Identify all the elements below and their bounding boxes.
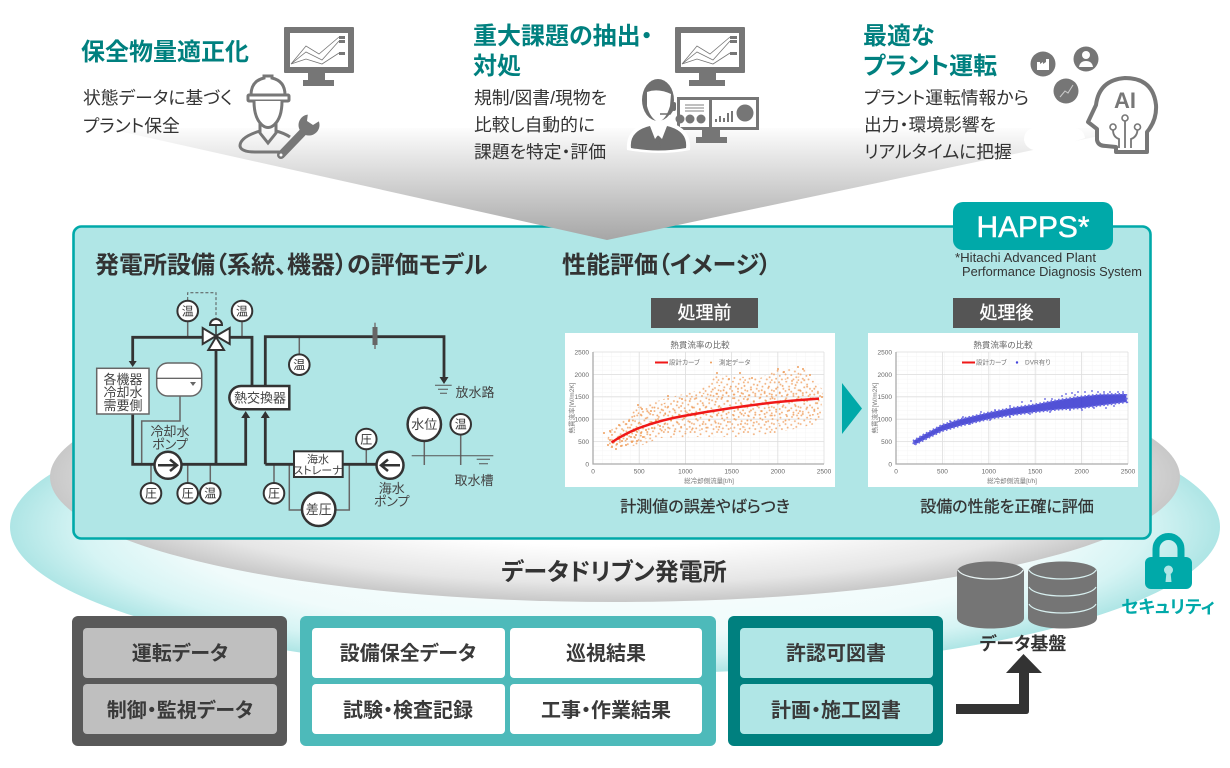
label: cooling water pump — [150, 424, 190, 452]
label: seawater pump: ポンプ — [374, 494, 410, 509]
note: HAPPS definition — [955, 251, 1142, 279]
label: before processing: 処理前 — [678, 303, 732, 323]
icon: AI head: AI — [1114, 88, 1136, 113]
tank — [157, 363, 202, 396]
text: optimal operation: プラント運転情報から — [864, 88, 1029, 108]
heading: critical issues — [473, 23, 653, 80]
axis ticks: 500 — [881, 439, 892, 446]
badge: HAPPS: HAPPS* — [976, 211, 1090, 244]
legend: DVR有り — [1025, 358, 1051, 366]
heat exchanger — [229, 386, 289, 409]
text: optimal operation — [864, 88, 1029, 162]
intake: 取水槽 — [454, 473, 494, 488]
panel: drawings: 許認可図書 — [786, 642, 886, 665]
sensor labels: 温 — [236, 304, 248, 318]
panel: operating data: 運転データ — [132, 641, 228, 665]
legend — [655, 358, 750, 366]
axis titles: 熱貫流率[W/m2K] — [567, 382, 576, 433]
line: design curve — [612, 399, 819, 442]
badge: HAPPS — [953, 202, 1113, 250]
axis ticks: 1000 — [878, 417, 892, 424]
heading: performance evaluation: 性能評価（イメージ） — [562, 252, 771, 279]
seawater pump — [376, 452, 404, 479]
text: maintenance — [83, 88, 233, 136]
axis titles: 熱貫流率[W/m2K] — [870, 382, 879, 433]
chart title: 熱貫流率の比較 — [670, 340, 730, 350]
axis ticks: 500 — [578, 439, 589, 446]
axis ticks: 500 — [937, 468, 948, 476]
axis ticks: 2500 — [878, 350, 892, 356]
strainer: 海水 — [307, 452, 329, 466]
block: maintenance optimisation — [81, 27, 354, 156]
axis ticks: 2000 — [878, 372, 892, 379]
label: after processing — [953, 298, 1060, 328]
panel: operating data: 制御・監視データ — [107, 698, 253, 722]
panel: maintenance data: 巡視結果 — [566, 642, 646, 665]
diagram: plant piping — [97, 293, 495, 526]
axis ticks: 1500 — [724, 468, 739, 476]
scatter: measured data — [604, 367, 823, 449]
axis titles: 総冷却側流量[t/h] — [684, 476, 734, 485]
panel: maintenance data: 試験・検査記録 — [343, 699, 473, 722]
arrow: before to after — [842, 383, 862, 434]
box: equipment demand: 冷却水 — [103, 385, 143, 400]
legend: 設計カーブ — [669, 358, 701, 366]
panel: HAPPS evaluation — [74, 202, 1150, 538]
axis titles: 総冷却側流量[t/h] — [987, 476, 1037, 485]
thin instrument lines — [142, 311, 461, 510]
sensor labels: 差圧 — [306, 502, 332, 517]
icon: monitor 2 — [675, 27, 745, 86]
label: cooling water pump: 冷却水 — [150, 424, 190, 439]
axis ticks: 2500 — [817, 468, 832, 476]
icon: dashboard screen — [676, 97, 759, 143]
axis ticks: 2000 — [1074, 468, 1089, 476]
heading: optimal operation: プラント運転 — [863, 53, 997, 80]
sensor labels: 温 — [182, 304, 194, 318]
label: before processing — [651, 298, 758, 328]
heading: optimal operation — [863, 23, 997, 80]
icon: database — [957, 562, 1097, 628]
text: optimal operation: 出力・環境影響を — [864, 115, 996, 135]
icon: AI head — [1088, 78, 1156, 152]
panel: maintenance data: 設備保全データ — [340, 641, 476, 665]
outfall — [435, 385, 495, 400]
icon: graph bubble — [1054, 78, 1078, 104]
gray platform ellipse — [50, 352, 1180, 602]
axis ticks: 0 — [894, 468, 898, 476]
block: critical issues — [473, 23, 759, 162]
label: cooling water pump: ポンプ — [152, 437, 188, 452]
icon: operator with headset — [627, 79, 690, 153]
label: after processing: 処理後 — [980, 303, 1034, 323]
axis ticks: 2000 — [575, 372, 589, 379]
text: maintenance: 状態データに基づく — [83, 88, 233, 108]
icon: monitor 1 — [284, 27, 354, 86]
legend: 測定データ — [719, 358, 750, 366]
chart: after — [868, 333, 1138, 487]
sensor labels: 圧 — [145, 487, 157, 501]
axis ticks — [878, 350, 1136, 476]
note: HAPPS definition: Performance Diagnosis System — [962, 265, 1142, 279]
icon: cloud highlight — [1024, 127, 1085, 151]
panel: maintenance data — [300, 616, 716, 746]
strainer: ストレーナ — [293, 464, 343, 477]
teal platform ellipse — [10, 380, 1220, 674]
axis ticks: 1000 — [575, 417, 589, 424]
panel: drawings: 計画・施工図書 — [771, 699, 901, 722]
panel: operating data — [72, 616, 287, 746]
heading: critical issues: 対処 — [473, 53, 521, 80]
sensor labels: 圧 — [360, 432, 372, 446]
icon: worker with wrench — [240, 76, 322, 156]
scatter: DVR data — [913, 391, 1127, 445]
axis ticks: 1000 — [982, 468, 996, 476]
box: equipment demand: 需要側 — [103, 398, 143, 413]
axis titles — [567, 382, 734, 485]
axis ticks: 500 — [634, 468, 645, 476]
sensor labels: 圧 — [268, 487, 280, 501]
axis ticks: 2500 — [1121, 468, 1136, 476]
block: optimal operation — [863, 23, 1156, 162]
label: seawater pump — [374, 481, 410, 509]
axis ticks: 0 — [888, 462, 892, 468]
text: critical issues: 課題を特定・評価 — [474, 142, 606, 162]
axis ticks: 2000 — [771, 468, 785, 476]
sensor labels: 温 — [204, 487, 216, 501]
sensor labels: 圧 — [182, 487, 194, 501]
axis ticks: 1500 — [1028, 468, 1043, 476]
orifice — [374, 323, 376, 349]
heading: optimal operation: 最適な — [863, 23, 934, 50]
sensor labels: 温 — [455, 418, 467, 432]
axis ticks: 0 — [591, 468, 595, 476]
outfall: 放水路 — [455, 385, 495, 400]
label: data platform: データ基盤 — [980, 633, 1066, 654]
heading: critical issues: 重大課題の抽出・ — [473, 23, 653, 50]
label: security: セキュリティ — [1121, 597, 1215, 617]
text: optimal operation: リアルタイムに把握 — [864, 142, 1012, 162]
sensors — [141, 301, 471, 526]
sensor labels: 温 — [293, 358, 305, 372]
legend: 設計カーブ — [976, 358, 1008, 366]
icon: lock — [1145, 536, 1192, 589]
chart: before — [565, 333, 835, 487]
text: critical issues: 規制/図書/現物を — [474, 88, 607, 108]
text: maintenance: プラント保全 — [83, 116, 180, 136]
panel: drawings — [728, 616, 943, 746]
arrow: to data platform — [956, 654, 1042, 714]
axis ticks: 1500 — [575, 394, 589, 401]
caption: after: 設備の性能を正確に評価 — [920, 498, 1094, 516]
axis ticks: 2500 — [575, 350, 589, 356]
axis ticks: 1500 — [878, 394, 892, 401]
label: seawater pump: 海水 — [379, 481, 405, 496]
sensor labels — [145, 304, 467, 517]
title: data driven plant: データドリブン発電所 — [501, 558, 727, 586]
heat exchanger: 熱交換器 — [234, 390, 286, 406]
chart title: 熱貫流率の比較 — [973, 340, 1033, 350]
cooling water pump — [154, 452, 182, 479]
axis ticks — [575, 350, 832, 476]
axis ticks: 1000 — [678, 468, 693, 476]
axis titles — [870, 382, 1037, 485]
axis ticks: 0 — [585, 462, 589, 468]
intake — [412, 456, 494, 488]
sensor labels: 水位 — [411, 417, 437, 432]
heading: model: 発電所設備（系統、機器）の評価モデル — [95, 251, 488, 279]
valve — [203, 319, 230, 350]
text: critical issues — [474, 88, 607, 162]
thick pipes — [133, 337, 444, 464]
heading: maintenance: 保全物量適正化 — [81, 39, 249, 66]
panel: maintenance data: 工事・作業結果 — [541, 699, 671, 722]
text: critical issues: 比較し自動的に — [474, 115, 595, 135]
note: HAPPS definition: *Hitachi Advanced Plant — [955, 251, 1097, 265]
box: equipment demand: 各機器 — [103, 372, 143, 387]
strainer — [293, 451, 343, 477]
box: equipment demand — [97, 368, 149, 414]
icon: factory bubble — [1030, 52, 1056, 76]
funnel background — [105, 128, 1137, 240]
caption: before: 計測値の誤差やばらつき — [620, 498, 790, 516]
legend — [962, 358, 1051, 366]
icon: person bubble — [1074, 46, 1098, 72]
